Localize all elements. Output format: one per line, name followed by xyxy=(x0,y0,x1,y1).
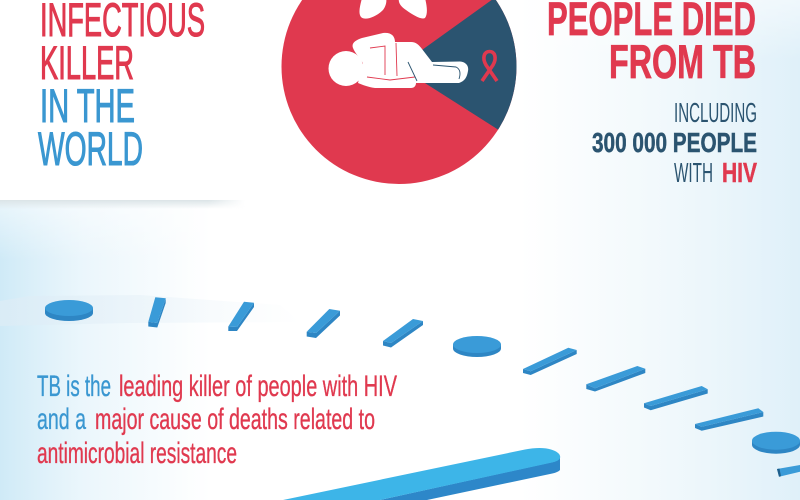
text block: including 300 000 people with HIV xyxy=(592,97,757,188)
dash 9 xyxy=(777,465,800,477)
disc 2 xyxy=(453,336,501,357)
dash 3 xyxy=(307,309,340,338)
dash 8 xyxy=(695,408,763,431)
text block: TB leading killer of people with HIV: TB is the xyxy=(37,370,111,403)
disc 3 xyxy=(752,432,800,454)
icon: lungs xyxy=(359,0,427,19)
dash 1 xyxy=(148,297,166,328)
panel: white card with soft shadow xyxy=(0,200,236,207)
heading: infectious killer in the world: WORLD xyxy=(38,122,143,175)
text block: TB leading killer of people with HIV xyxy=(37,370,397,470)
dash 4 xyxy=(383,319,423,348)
text block: TB leading killer of people with HIV: and a xyxy=(37,403,86,436)
text block: including 300 000 people with HIV: WITH xyxy=(674,157,713,188)
timeline: 3D dashes and discs xyxy=(45,297,800,500)
icon: red ribbon xyxy=(482,52,497,81)
text block: TB leading killer of people with HIV: major cause of deaths related to xyxy=(95,403,375,436)
text block: TB leading killer of people with HIV: antimicrobial resistance xyxy=(37,437,237,470)
icon: person lying down xyxy=(328,33,468,88)
heading: infectious killer in the world: KILLER xyxy=(40,36,134,89)
disc 1 xyxy=(45,300,93,321)
dash 5 xyxy=(523,348,577,375)
heading: infectious killer in the world xyxy=(38,0,205,175)
heading: infectious killer in the world: IN THE xyxy=(40,79,135,132)
text block: including 300 000 people with HIV: HIV xyxy=(722,157,757,188)
text block: TB leading killer of people with HIV: leading killer of people with HIV xyxy=(119,370,397,403)
dash 2 xyxy=(228,302,254,331)
dash 6 xyxy=(586,366,645,392)
pie chart: TB deaths with HIV share xyxy=(282,0,516,184)
heading: people died from TB xyxy=(547,0,756,88)
dash 7 xyxy=(644,386,708,410)
large bar xyxy=(283,448,560,500)
